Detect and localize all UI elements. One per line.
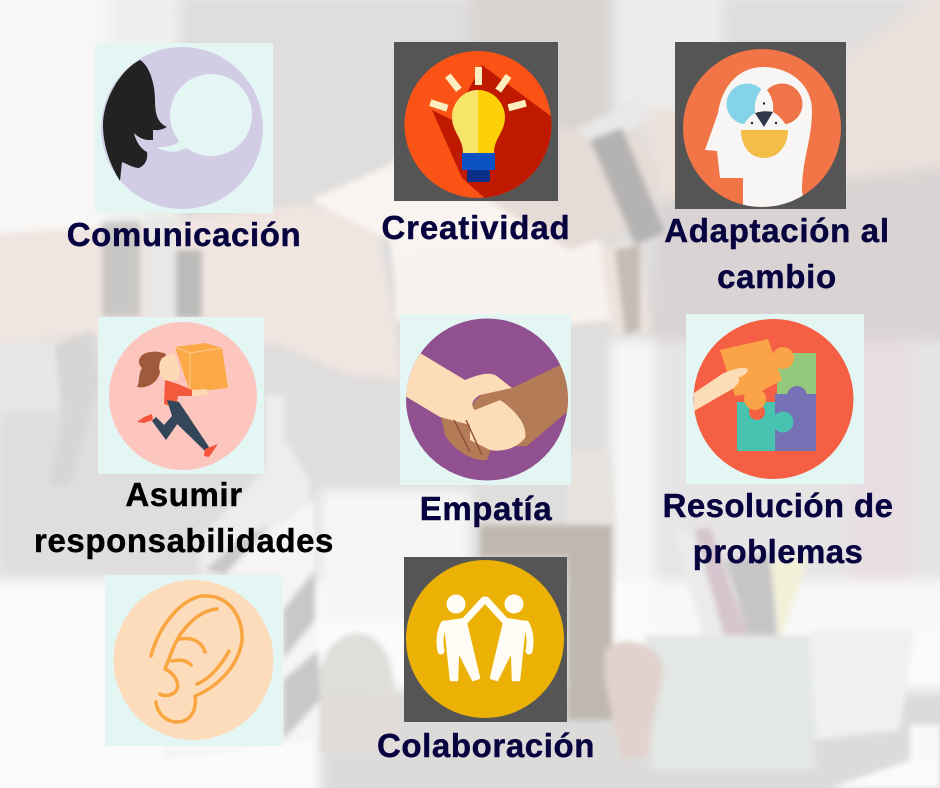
label: Adaptación al cambio: Adaptación al: [664, 212, 890, 249]
pens: [672, 528, 730, 640]
panel: creatividad: [394, 42, 560, 205]
panel: asumir responsabilidades: [98, 317, 264, 474]
arm and fist: [0, 205, 400, 378]
label: Resolución de problemas: problemas: [693, 533, 863, 570]
label: Comunicación: Comunicación: [67, 216, 301, 253]
jar: [567, 450, 615, 720]
panel: empatía: [400, 314, 575, 485]
panel: resolución de problemas: [686, 314, 864, 484]
label: Adaptación al cambio: [664, 212, 890, 295]
label: Colaboración: Colaboración: [377, 727, 595, 764]
label: Resolución de problemas: Resolución de: [663, 487, 893, 524]
figure: left person: [440, 594, 484, 680]
label: Adaptación al cambio: cambio: [717, 258, 837, 295]
figure: right person: [486, 594, 530, 680]
label: Resolución de problemas: [663, 487, 893, 570]
panel: comunicación: [95, 43, 273, 213]
cup, bowl and stamp: [645, 635, 815, 770]
cactus: [318, 633, 395, 695]
panel: escucha (oreja): [105, 575, 283, 746]
label: Asumir responsabilidades: Asumir: [125, 476, 243, 513]
bracelets: [102, 222, 140, 317]
label: Creatividad: Creatividad: [381, 209, 571, 246]
label: Empatía: Empatía: [420, 490, 552, 527]
bottle: [198, 395, 312, 580]
panel: colaboración: [404, 557, 567, 722]
watch: [578, 95, 650, 150]
label: Asumir responsabilidades: [34, 476, 334, 560]
panel: adaptación al cambio: [675, 42, 846, 212]
label: Asumir responsabilidades: responsabilidades: [34, 522, 334, 559]
icons: [95, 42, 864, 746]
